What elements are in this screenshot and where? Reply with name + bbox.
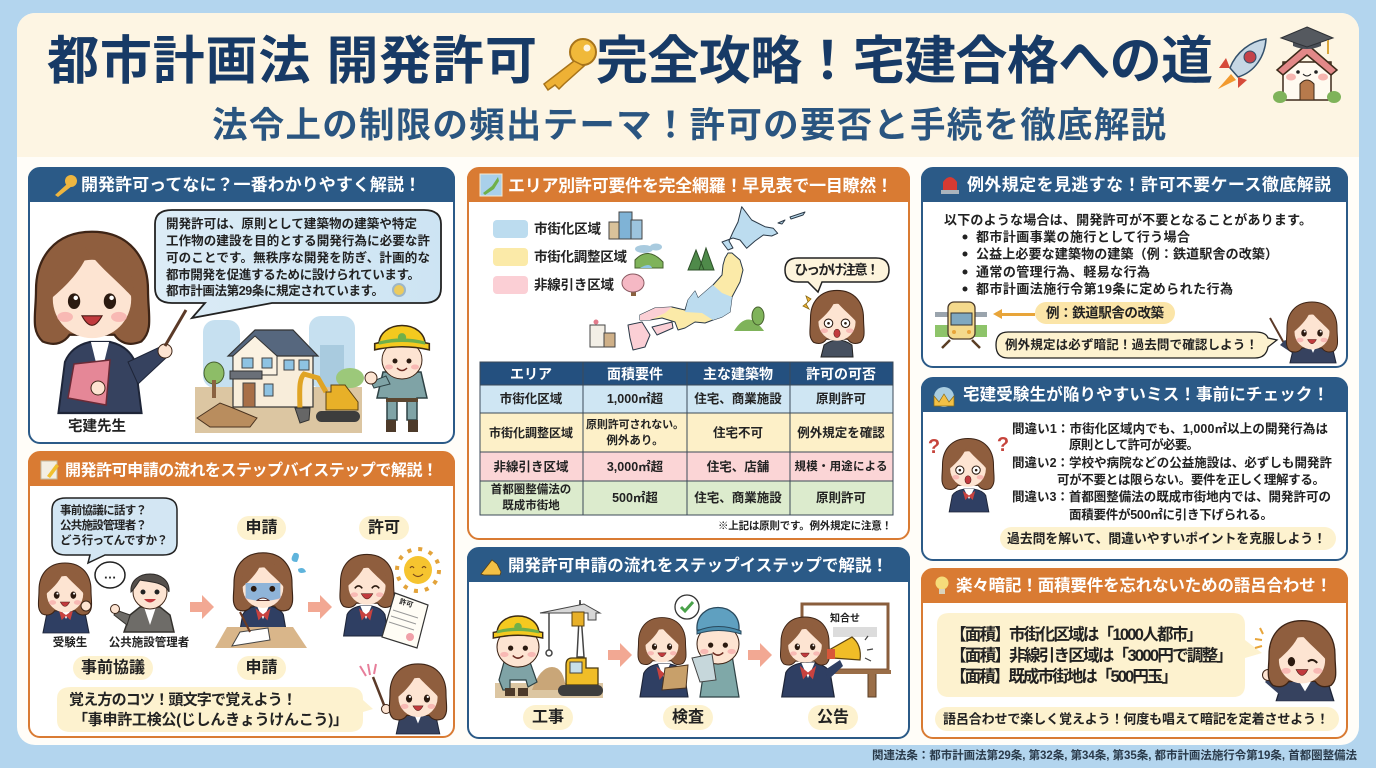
panel: what is development permission [28, 168, 455, 443]
pill: inspection: 検査 [672, 707, 704, 726]
permit table [480, 362, 893, 515]
speech bubble: memorise exceptions: 例外規定は必ず暗記！過去問で確認しよう！ [1005, 337, 1258, 352]
icon: key [544, 39, 596, 90]
pill: application bottom [237, 656, 286, 680]
speech bubble: trap warning [785, 258, 889, 292]
panel: common mistakes [921, 378, 1348, 560]
pill: chant tip: 語呂合わせで楽しく覚えよう！何度も唱えて暗記を定着させよう！ [943, 712, 1329, 726]
permit table: エリア [510, 366, 552, 382]
pill: application bottom: 申請 [245, 658, 278, 676]
pill: application top: 申請 [245, 518, 278, 536]
title: 完全攻略！宅建合格への道 [596, 33, 1213, 91]
mistakes list [1012, 421, 1332, 522]
exceptions intro: 以下のような場合は、開発許可が不要となることがあります。 [944, 212, 1312, 228]
permit table: 原則許可されない。 [586, 417, 684, 431]
icon: permit certificate [382, 593, 428, 648]
mnemonic bubble: 【面積】既成市街地は「500円玉」 [950, 666, 1178, 686]
pill: permission [359, 516, 409, 540]
icon: lightning mark [803, 296, 811, 309]
label: teacher name: 宅建先生 [68, 418, 126, 435]
character: puzzled student [942, 438, 994, 512]
pill: station example: 例：鉄道駅舎の改築 [1046, 304, 1164, 320]
icon: question marks: ? [997, 434, 1009, 456]
title [47, 33, 1213, 91]
pill: past exam tip [1000, 527, 1336, 550]
illustration: construction work [493, 600, 603, 698]
arrow: points to train [993, 309, 1035, 319]
permit table: 市街化調整区域 [489, 425, 573, 440]
pill: chant tip [935, 707, 1339, 731]
icon: train [935, 302, 987, 348]
character: teacher pointing [360, 664, 447, 734]
arrow [308, 595, 332, 619]
speech bubble: student question: 公共施設管理者？ [60, 518, 147, 532]
legend: 市街化区域 [534, 220, 602, 236]
tip bubble: 「事申許工検公(じしんきょうけんこう)」 [73, 710, 348, 728]
panel: permit requirements by area [467, 168, 910, 539]
label: student: 受験生 [53, 635, 87, 649]
icon: house with graduation cap [1273, 27, 1341, 103]
permit table: 許可の可否 [806, 366, 876, 382]
icon: map [480, 174, 502, 196]
character: student with clipboard [638, 618, 688, 697]
notice board: 知合せ [830, 612, 860, 624]
pill: construction [523, 705, 573, 730]
icon: question marks [928, 434, 1009, 458]
arrow [190, 595, 214, 619]
mistakes list: 面積要件が500㎡に引き下げられる。 [1069, 507, 1273, 522]
speech bubble: definition: 都市計画法第29条に規定されています。 [166, 283, 384, 298]
speech bubble: definition: 開発許可は、原則として建築物の建築や特定 [166, 216, 417, 231]
speech bubble: student question: どう行ってんですか？ [60, 533, 168, 547]
pill: application top [237, 516, 286, 540]
character: student with megaphone [780, 617, 873, 697]
character: inspector [692, 608, 741, 697]
label: facility manager: 公共施設管理者 [109, 635, 189, 649]
mnemonic bubble: 【面積】非線引き区域は「3000円で調整」 [950, 646, 1233, 665]
illustration: construction site [195, 316, 364, 433]
panel heading: 例外規定を見逃すな！許可不要ケース徹底解説 [967, 174, 1331, 194]
check mark bubble [675, 595, 699, 619]
permit table: 原則許可 [816, 490, 866, 505]
tip bubble: 覚え方のコツ！頭文字で覚えよう！ [69, 690, 297, 708]
pill: station example [1035, 302, 1175, 324]
character: worker [365, 325, 429, 432]
pill: public notice: 公告 [817, 708, 849, 726]
permit table: 住宅不可 [713, 425, 763, 440]
title: 都市計画法 開発許可 [47, 33, 537, 91]
icon: rocket [1218, 39, 1266, 89]
notice board [802, 604, 891, 697]
mistakes list: 間違い1：市街化区域内でも、1,000㎡以上の開発行為は [1012, 421, 1328, 436]
character: student [38, 563, 92, 633]
permit table: 1,000㎡超 [607, 391, 664, 406]
icon: question marks: ? [928, 436, 940, 458]
speech bubble: memorise exceptions [996, 332, 1277, 358]
pill: past exam tip: 過去問を解いて、間違いやすいポイントを克服しよう！ [1007, 531, 1326, 546]
speech bubble: definition [155, 210, 441, 318]
panel heading: 宅建受験生が陥りやすいミス！事前にチェック！ [963, 384, 1329, 404]
speech bubble: student question [52, 498, 177, 563]
character: happy student with permit [340, 554, 394, 636]
legend: 市街化調整区域 [534, 248, 628, 264]
speech bubble: student question: 事前協議に話す？ [60, 503, 147, 517]
map of Japan [628, 207, 805, 350]
icon: hospital building [590, 320, 615, 347]
permit table: 原則許可 [816, 391, 866, 406]
exceptions list: 都市計画事業の施行として行う場合 [976, 230, 1190, 244]
footer: related law articles: 関連法条：都市計画法第29条, 第32条, 第34条, 第35条, 都市計画法施行令第19条, 首都圏整備法 [872, 748, 1358, 762]
pill: construction: 工事 [532, 707, 564, 726]
panel: application flow step by step [28, 452, 455, 737]
icon: light bulb [936, 576, 948, 594]
permit table: 住宅、店舗 [707, 459, 769, 474]
exceptions list: 通常の管理行為、軽易な行為 [976, 264, 1150, 280]
panel: exceptions [921, 168, 1348, 367]
arrow [608, 643, 632, 667]
character: winking teacher [1255, 621, 1336, 701]
permit table: 市街化区域 [500, 391, 563, 406]
header band [17, 13, 1359, 157]
panel heading: 開発許可申請の流れをステップバイステップで解説！ [65, 460, 438, 480]
permit table: 例外あり。 [606, 433, 664, 447]
character: teacher pointing [1270, 302, 1338, 363]
pill: prior consultation [73, 656, 153, 680]
mistakes list: 間違い3：首都圏整備法の既成市街地内では、開発許可の [1012, 489, 1331, 504]
pill: permission: 許可 [368, 518, 400, 536]
thought bubble: dots [95, 562, 125, 588]
permit table: 3,000㎡超 [607, 459, 664, 474]
icon: buildings [609, 212, 642, 239]
panel heading: 楽々暗記！面積要件を忘れないための語呂合わせ！ [956, 576, 1332, 595]
panel heading: 開発許可ってなに？一番わかりやすく解説！ [81, 174, 421, 194]
arrow [748, 643, 772, 667]
permit table: 500㎡超 [612, 490, 658, 505]
speech bubble: trap warning: ひっかけ注意！ [794, 262, 880, 278]
thought bubble: dots: … [104, 566, 116, 582]
icon: permit certificate: 許可 [398, 597, 414, 609]
permit table: 首都圏整備法の [491, 482, 571, 496]
exceptions list [962, 230, 1278, 296]
icon: siren [941, 177, 959, 194]
permit table: 非線引き区域 [493, 459, 569, 474]
speech bubble: definition: 工作物の建設を目的とする開発行為に必要な許 [166, 233, 430, 248]
icon: tree and hill [734, 307, 764, 331]
permit table: 住宅、商業施設 [694, 490, 782, 505]
permit table: 例外規定を確認 [797, 425, 885, 440]
permit table: 規模・用途による [794, 459, 888, 473]
legend [493, 220, 628, 294]
mnemonic bubble: 【面積】市街化区域は「1000人都市」 [950, 624, 1203, 644]
permit table: 既成市街地 [502, 498, 560, 512]
panel: mnemonics [921, 569, 1348, 738]
character: surprised student [810, 290, 864, 357]
panel: construction to public notice [467, 548, 910, 738]
tip bubble [57, 687, 373, 732]
speech bubble: definition: 可のことです。無秩序な開発を防ぎ、計画的な [166, 250, 430, 265]
mistakes list: 可が不要とは限らない。要件を正しく理解する。 [1057, 472, 1325, 487]
icon: screaming face [934, 387, 954, 407]
icon: writing hand [481, 560, 501, 575]
mistakes list: 間違い2：学校や病院などの公益施設は、必ずしも開発許 [1012, 455, 1332, 470]
table note: ※上記は原則です。例外規定に注意！ [718, 519, 892, 532]
legend: 非線引き区域 [534, 276, 614, 292]
icon: smiling sun [397, 549, 439, 591]
panel heading: 開発許可申請の流れをステップイステップで解説！ [508, 555, 888, 575]
permit table: 面積要件 [607, 366, 663, 382]
character: teacher [35, 232, 186, 413]
mistakes list: 原則として許可が必要。 [1069, 437, 1199, 452]
panel heading: エリア別許可要件を完全網羅！早見表で一目瞭然！ [508, 176, 893, 196]
icon: memo [41, 461, 59, 479]
icon: hills [635, 244, 663, 268]
icon: key small [55, 175, 77, 197]
exceptions list: 公益上必要な建築物の建築（例：鉄道駅舎の改築） [976, 246, 1278, 262]
permit table: 住宅、商業施設 [694, 391, 782, 406]
icon: cherry tree [622, 274, 644, 296]
pill: prior consultation: 事前協議 [81, 658, 145, 676]
speech bubble: definition: 都市開発を促進するために設けられています。 [166, 267, 420, 282]
icon: pine trees [688, 248, 714, 270]
character: facility manager [110, 574, 174, 632]
permit table: 主な建築物 [703, 366, 773, 382]
subtitle: 法令上の制限の頻出テーマ！許可の要否と手続を徹底解説 [212, 105, 1166, 145]
exceptions list: 都市計画法施行令第19条に定められた行為 [976, 282, 1233, 296]
character: worried student at desk [215, 553, 307, 648]
pill: public notice [808, 705, 858, 730]
pill: inspection [663, 705, 713, 730]
mnemonic bubble [937, 613, 1262, 697]
